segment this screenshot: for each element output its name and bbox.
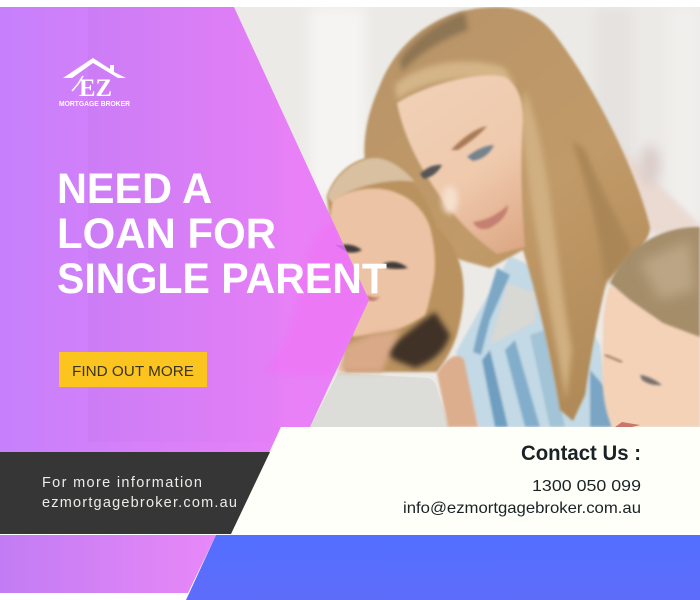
pillow: [627, 156, 700, 234]
text: for more information: For more information: [42, 475, 202, 491]
icon: key: [72, 76, 83, 91]
contact details: [403, 442, 641, 517]
girl arm: [437, 356, 478, 427]
mother eyes, nose and mouth: [420, 126, 508, 229]
panel: contact background: [231, 427, 700, 535]
title: [57, 165, 387, 303]
panel: more information: [0, 452, 270, 534]
text: website: ezmortgagebroker.com.au: [42, 495, 237, 511]
email address: info@ezmortgagebroker.com.au: [403, 500, 641, 517]
title: LOAN FOR: [57, 210, 276, 258]
laptop: [310, 373, 449, 427]
bottom purple band: [0, 535, 216, 593]
phone number: 1300 050 099: [532, 478, 641, 495]
purple angled panel: [0, 7, 369, 452]
title: SINGLE PARENT: [57, 255, 387, 303]
overlay inside the purple panel: [273, 224, 353, 370]
shirt: [456, 256, 612, 427]
button: find out more: FIND OUT MORE: [72, 363, 194, 380]
boy: [602, 227, 700, 427]
hair shading: [395, 12, 632, 400]
logo EZ letters: EZ: [79, 75, 112, 102]
button: find out more: [59, 352, 207, 387]
logo wordmark: MORTGAGE BROKER: [59, 101, 130, 108]
bottom blue band: [186, 535, 700, 600]
girl: [327, 158, 464, 372]
icon: house roof: [63, 58, 126, 78]
logo: EZ Mortgage Broker: [59, 58, 130, 108]
mother face: [397, 75, 525, 254]
mother hair: [364, 7, 650, 421]
title: NEED A: [57, 165, 212, 213]
heading: contact us: Contact Us :: [521, 442, 641, 465]
wall panels: [314, 12, 621, 192]
photo: mother with two children at a laptop: [230, 7, 700, 427]
